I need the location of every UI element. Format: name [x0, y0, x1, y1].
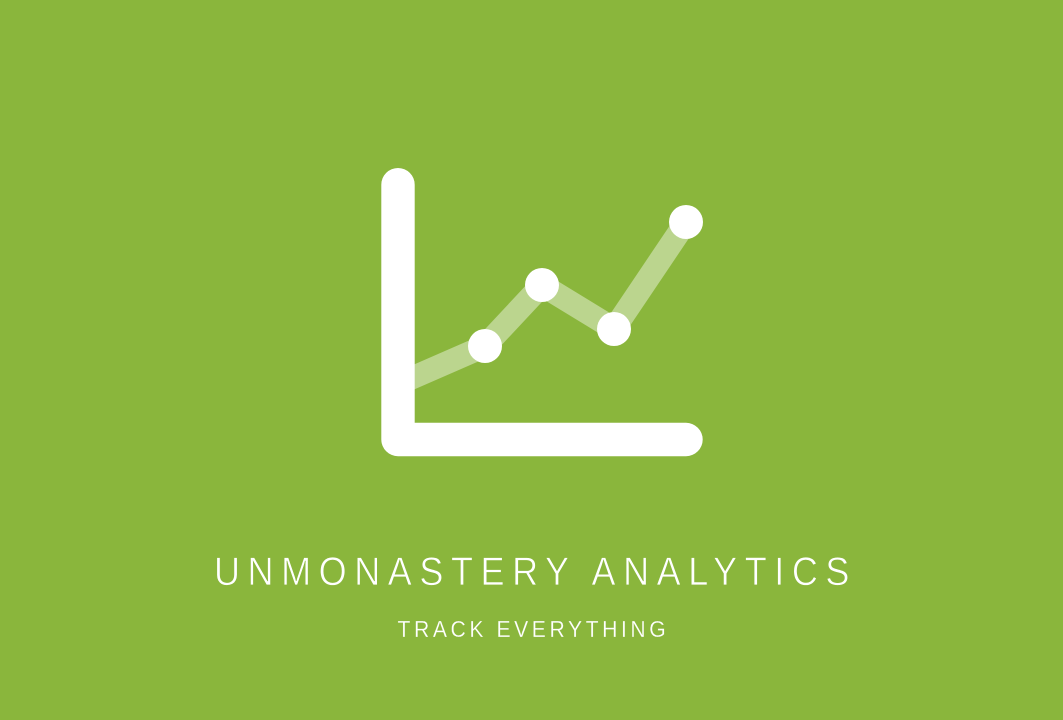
icon: line chart	[398, 185, 703, 440]
tagline: TRACK EVERYTHING	[398, 616, 666, 642]
chart axes	[398, 185, 686, 440]
data line	[398, 222, 686, 384]
title: UNMONASTERY ANALYTICS	[214, 550, 849, 594]
data points	[468, 205, 703, 363]
